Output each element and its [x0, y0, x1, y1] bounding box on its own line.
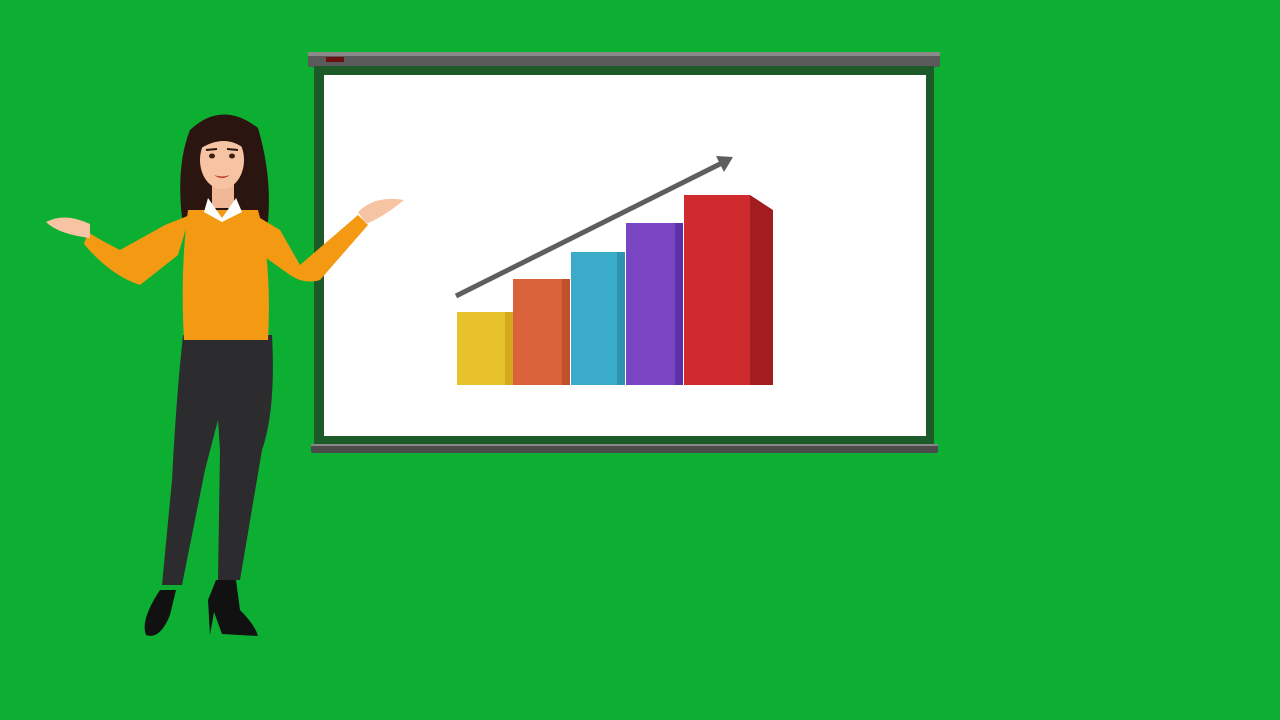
presenter woman [46, 114, 404, 636]
arrow [456, 156, 733, 296]
bar chart [457, 195, 773, 385]
projector screen [308, 52, 940, 453]
